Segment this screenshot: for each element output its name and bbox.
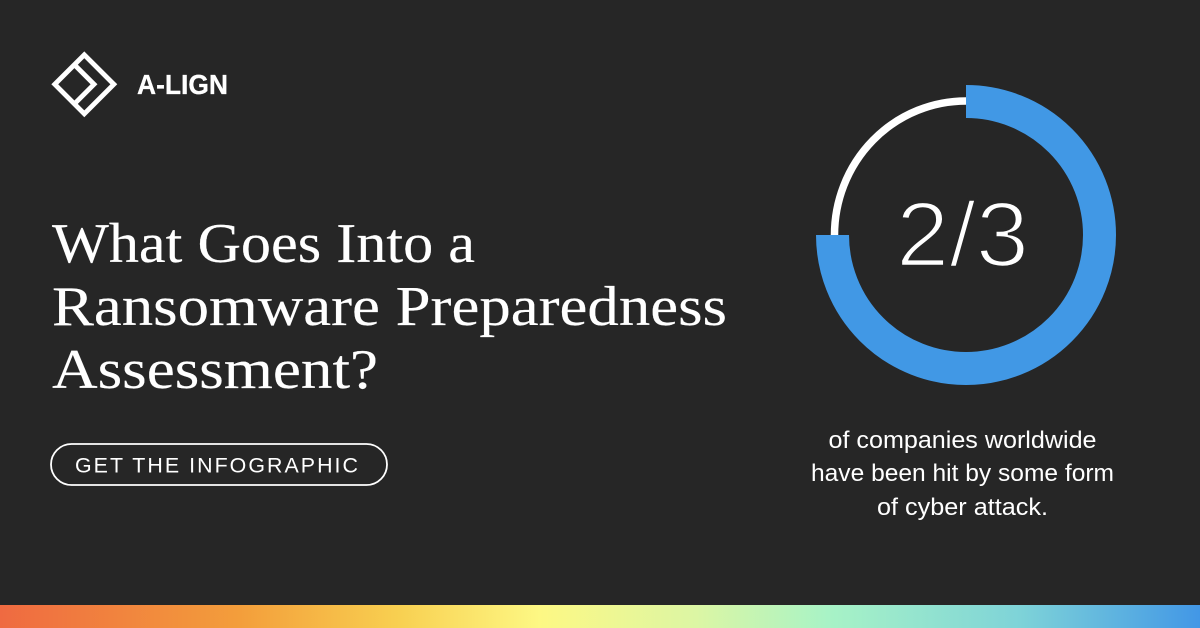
title: Ransomware Preparedness [52,276,727,338]
caption text: have been hit by some form [811,460,1114,487]
highlighted arc [832,102,1100,368]
gradient bar [0,605,1200,628]
button: get the infographic [51,444,387,485]
button: get the infographic: GET THE INFOGRAPHIC [75,454,360,477]
title [52,213,727,401]
logo wordmark: A-LIGN [137,69,228,100]
caption text: of companies worldwide [828,427,1096,454]
caption text: of cyber attack. [877,494,1048,521]
title: Assessment? [52,339,378,401]
remaining arc [834,101,966,235]
title: What Goes Into a [52,213,475,275]
icon: diamond logo mark [55,55,114,114]
donut value: 2/3 [896,184,1029,286]
donut chart: two thirds [832,101,1100,368]
caption text [811,427,1114,521]
logo: A-LIGN [55,55,228,114]
